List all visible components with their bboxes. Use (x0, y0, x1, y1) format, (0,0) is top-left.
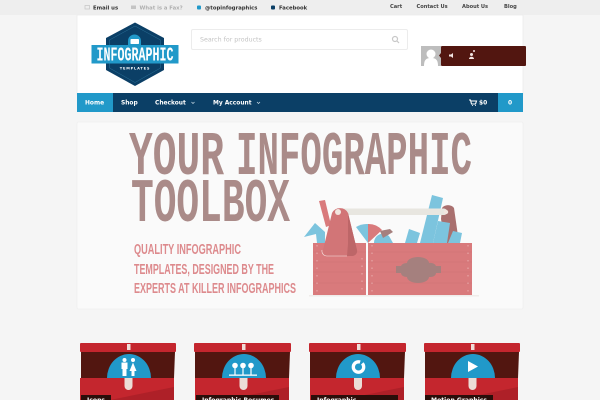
icon: facebook (271, 6, 275, 10)
icon: donut chart (353, 362, 364, 372)
toolbox right bracket (441, 205, 459, 243)
nav: checkout caret (192, 102, 194, 104)
icon: cart (469, 100, 476, 106)
icon: play (468, 361, 478, 372)
nav: my account: My Account (213, 100, 252, 106)
navigation bar (77, 93, 523, 112)
link: contact us: Contact Us (416, 4, 448, 10)
nav: shop: Shop (121, 100, 138, 106)
product chest: motion graphics (424, 343, 520, 400)
link: blog: Blog (504, 4, 517, 10)
logo: INFOGRAPHIC (96, 44, 174, 66)
subheading: QUALITY INFOGRAPHIC (134, 242, 241, 258)
nav: home active (77, 93, 113, 112)
search box: Search for products (200, 36, 262, 44)
share widget (439, 46, 526, 66)
subheading: EXPERTS AT KILLER INFOGRAPHICS (134, 281, 296, 297)
illustration: toolbox (304, 195, 479, 296)
icon: twitter (197, 6, 201, 10)
cart total: $0 (479, 100, 487, 106)
icon: fax (131, 6, 136, 9)
link: facebook: Facebook (279, 6, 308, 12)
panel: hero banner (77, 122, 523, 309)
nav: account caret (257, 102, 260, 104)
toolbox plaque (396, 257, 441, 283)
panel: header (77, 15, 526, 95)
icon: timeline (229, 363, 257, 376)
toolbox rivets (317, 245, 468, 293)
toolbox right section (368, 243, 472, 295)
toolbox left bracket (323, 208, 357, 256)
toolbox left section (313, 243, 366, 295)
subheading: TEMPLATES, DESIGNED BY THE (134, 262, 274, 278)
product chest: icons (80, 343, 176, 400)
search box (192, 30, 408, 50)
link: email us: Email us (93, 6, 118, 12)
product chest: infographic resumes (194, 343, 291, 400)
toolbox contents (304, 195, 462, 243)
heading line 2: TOOLBOX (131, 169, 290, 240)
heading line 1 (129, 122, 472, 193)
product chest: infographic (309, 343, 406, 400)
link: cart: Cart (390, 4, 403, 10)
toolbox bar handle (338, 208, 447, 215)
toolbox wood grain (313, 252, 472, 283)
link: what is a fax: What is a Fax? (140, 6, 183, 12)
top utility bar (0, 0, 600, 15)
subheading (134, 242, 296, 297)
icon: people (122, 358, 136, 376)
nav: checkout: Checkout (155, 100, 186, 106)
link: twitter handle: @topinfographics (205, 6, 257, 12)
nav: home active: Home (85, 100, 104, 106)
icon: email (85, 6, 90, 9)
cart count: 0 (508, 100, 512, 106)
logo (92, 22, 178, 86)
avatar (421, 46, 441, 66)
logo: TEMPLATES (120, 66, 150, 70)
cart count (498, 93, 523, 112)
icon: magnifier (392, 36, 399, 43)
link: about us: About Us (462, 4, 488, 10)
heading line 1: YOUR (129, 122, 225, 193)
